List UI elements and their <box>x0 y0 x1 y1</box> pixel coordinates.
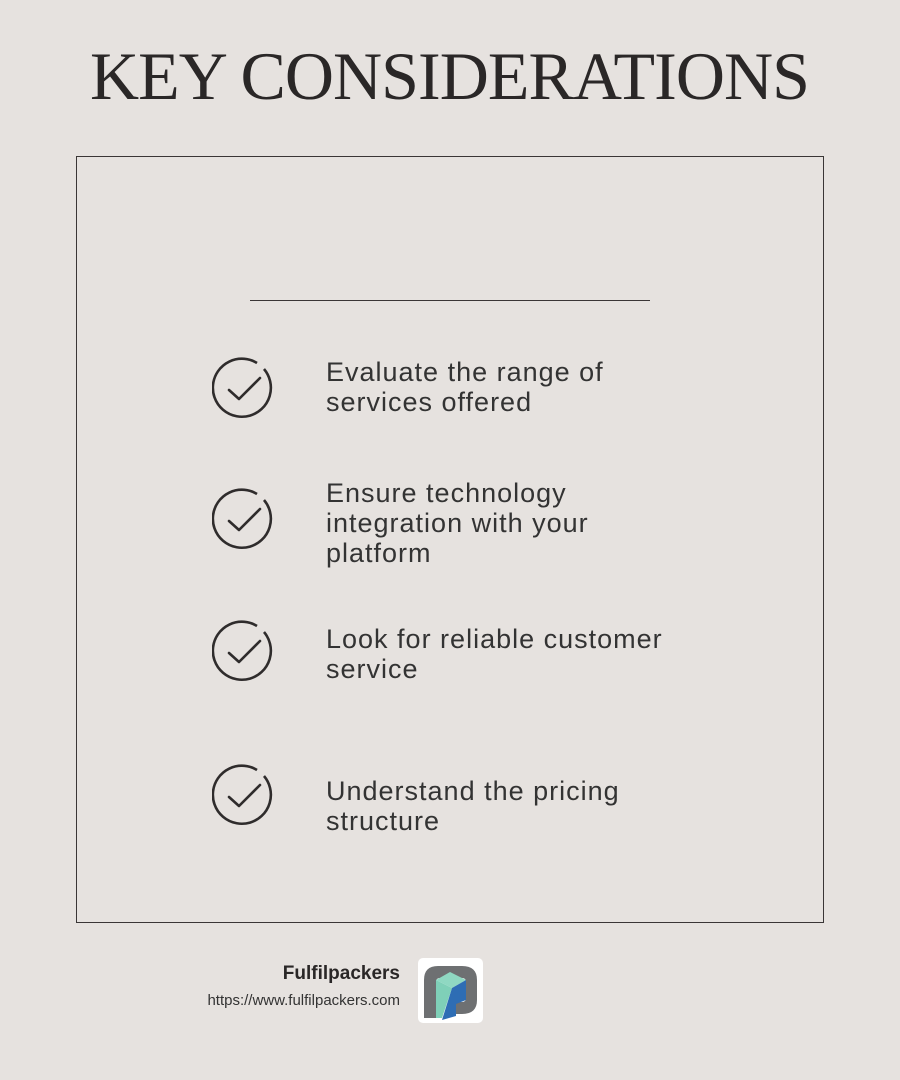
text: item 1 <box>326 357 604 417</box>
panel: considerations box <box>76 156 824 923</box>
divider line <box>250 300 650 301</box>
text: item 4: structure <box>326 806 440 836</box>
footer brand text: Fulfilpackers <box>283 963 400 984</box>
icon: check 3 <box>212 620 272 681</box>
title: KEY CONSIDERATIONS <box>90 38 810 114</box>
icon: check 2 <box>212 488 272 549</box>
text: item 2: Ensure technology <box>326 478 567 508</box>
footer brand text <box>207 963 400 1009</box>
icon: check 1 <box>212 357 272 418</box>
text: item 4: Understand the pricing <box>326 776 620 806</box>
text: item 3: Look for reliable customer <box>326 624 663 654</box>
icon: logo <box>418 958 483 1023</box>
text: item 2 <box>326 478 589 568</box>
text: item 1: services offered <box>326 387 532 417</box>
text: item 3 <box>326 624 663 684</box>
text: item 3: service <box>326 654 419 684</box>
text: item 2: platform <box>326 538 432 568</box>
text: item 4 <box>326 776 620 836</box>
footer brand text: https://www.fulfilpackers.com <box>207 992 400 1009</box>
text: item 2: integration with your <box>326 508 589 538</box>
text: item 1: Evaluate the range of <box>326 357 604 387</box>
icon: check 4 <box>212 764 272 825</box>
